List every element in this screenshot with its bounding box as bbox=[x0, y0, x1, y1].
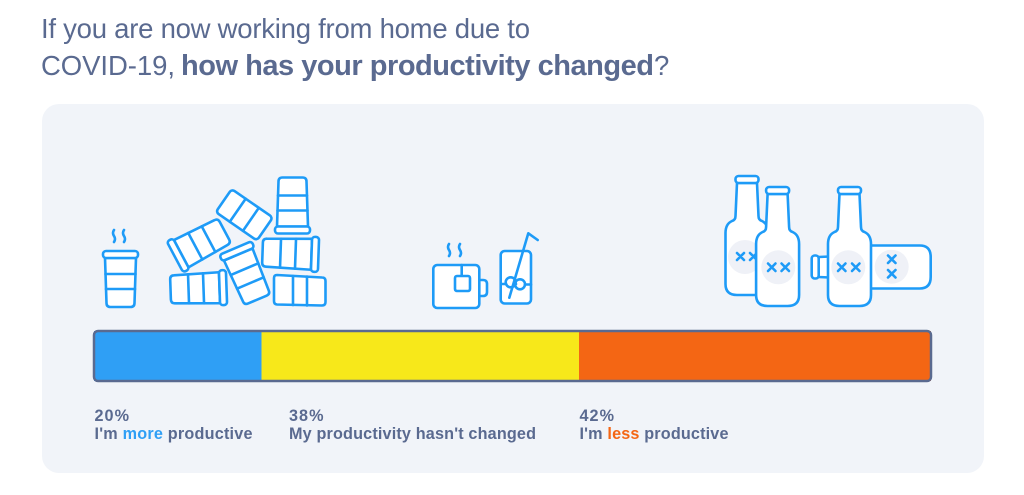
title: how has your productivity changed bbox=[181, 50, 654, 82]
label: 20% more productive bbox=[94, 407, 252, 443]
title: If you are now working from home due to bbox=[41, 13, 530, 44]
icon: beer bottles group right bbox=[812, 187, 931, 306]
icon: single coffee cup with steam bbox=[103, 230, 138, 307]
title: ? bbox=[654, 50, 669, 81]
label: 38% unchanged: My productivity hasn't changed bbox=[289, 425, 536, 443]
label: 42% less productive: I'm less productive bbox=[580, 425, 728, 443]
stacked bar chart bbox=[94, 331, 931, 381]
label: 20% more productive: 20% bbox=[94, 407, 129, 425]
label: 38% unchanged: 38% bbox=[289, 407, 324, 425]
label: 20% more productive: I'm more productive bbox=[94, 425, 252, 443]
title: COVID-19, bbox=[41, 50, 175, 81]
icon: beer bottles group left bbox=[726, 176, 799, 306]
icon: iced drink with straw bbox=[501, 233, 538, 304]
panel: survey results bbox=[42, 104, 984, 473]
title bbox=[41, 13, 669, 82]
label: 38% unchanged bbox=[289, 407, 536, 443]
label: 42% less productive bbox=[580, 407, 728, 443]
icon: tea mug bbox=[433, 244, 487, 308]
icon: pile of coffee cups bbox=[167, 178, 326, 307]
label: 42% less productive: 42% bbox=[580, 407, 614, 425]
